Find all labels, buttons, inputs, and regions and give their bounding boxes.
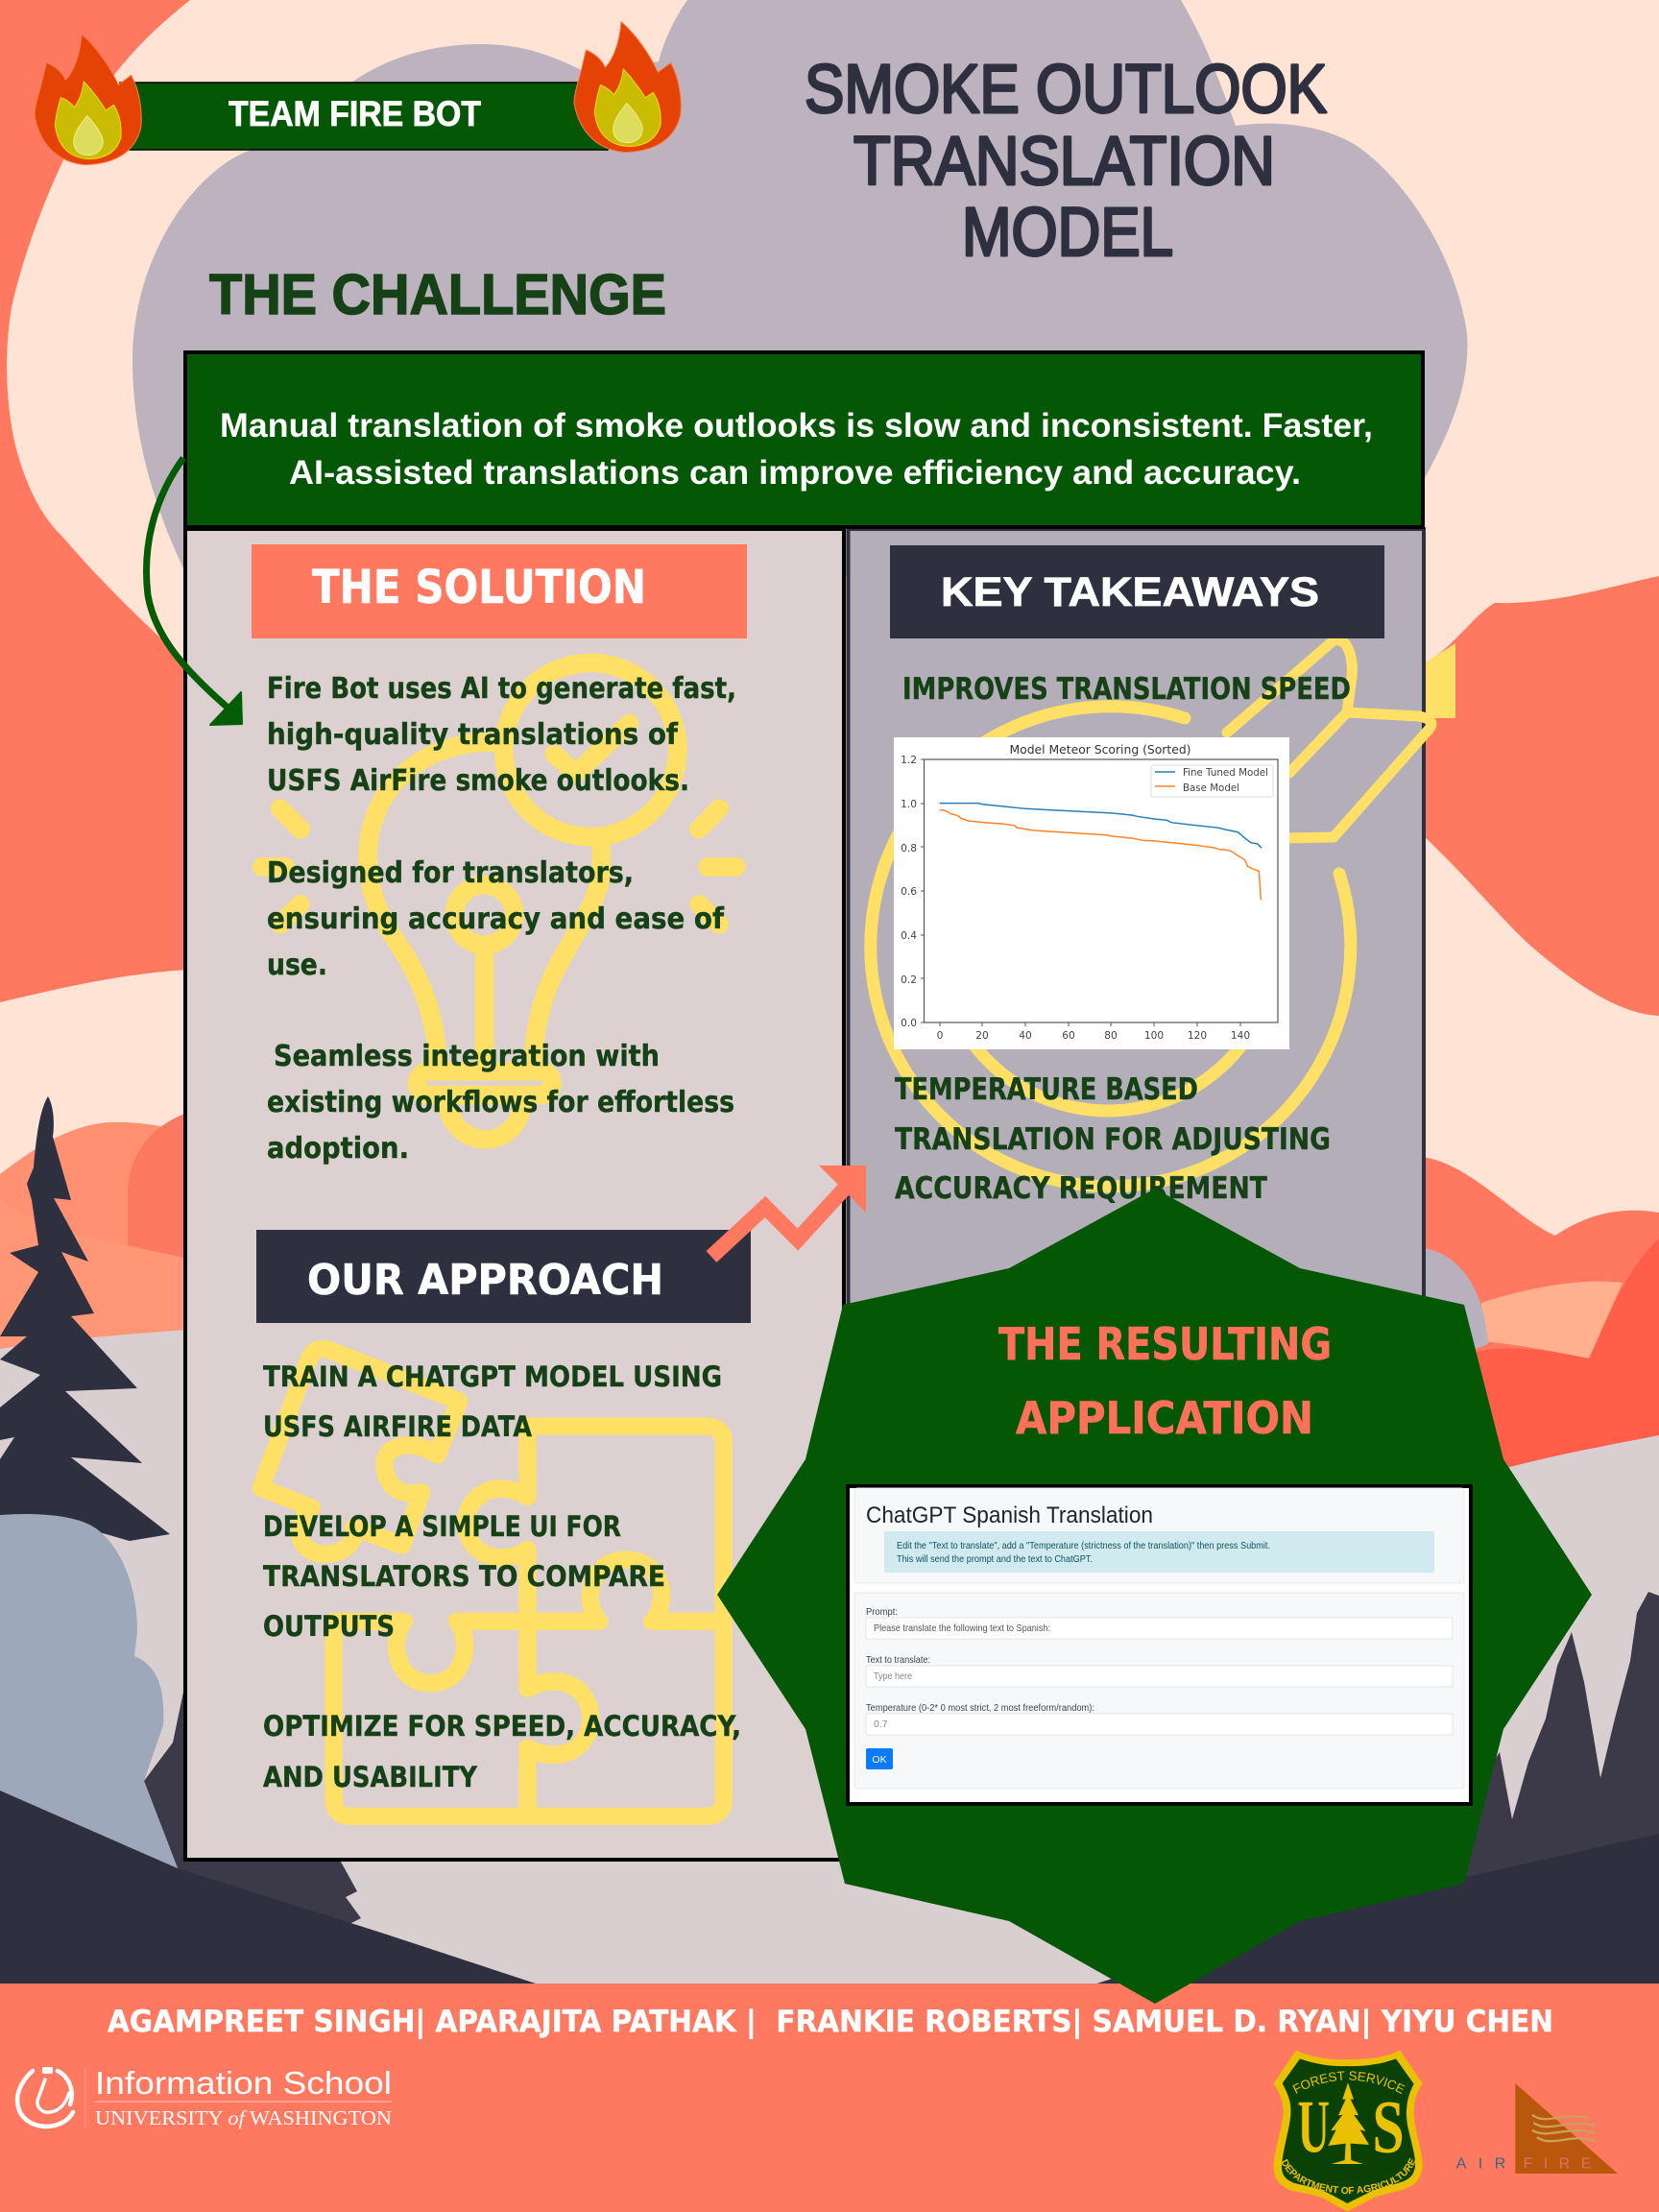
logo: forest service shield: S (1372, 2085, 1405, 2169)
legend: Fine Tuned Model (1183, 767, 1268, 779)
x axis labels: 120 (1188, 1030, 1207, 1042)
right coral hills (1421, 1157, 1659, 1479)
team names: AGAMPREET SINGH| APARAJITA PATHAK | FRANKIE ROBERTS| SAMUEL D. RYAN| YIYU CHEN (108, 2005, 1553, 2039)
title: MODEL (962, 195, 1173, 271)
heading: our approach: OUR APPROACH (307, 1256, 663, 1305)
icon: lightbulb with check (262, 662, 736, 1140)
text: solution points: Designed for translators, (267, 856, 634, 890)
text: temperature based translation: TRANSLATION FOR ADJUSTING (895, 1122, 1331, 1157)
legend (1151, 765, 1273, 797)
x axis labels: 40 (1019, 1030, 1032, 1042)
heading: the resulting application (998, 1318, 1332, 1444)
x axis labels (937, 1030, 1250, 1042)
text: solution points: USFS AirFire smoke outlooks. (267, 764, 689, 798)
heading: our approach (256, 1230, 751, 1323)
application screenshot: Please translate the following text to Spanish: (874, 1623, 1050, 1634)
logo: forest service shield: FOREST SERVICE (1292, 2071, 1406, 2094)
right light band (1481, 1282, 1623, 1358)
text: approach steps (263, 1360, 741, 1793)
text: approach steps: OPTIMIZE FOR SPEED, ACCURACY, (263, 1710, 741, 1743)
right red hill (1469, 1238, 1659, 1479)
text: solution points: Fire Bot uses AI to generate fast, (267, 672, 736, 706)
green challenge box (185, 352, 1423, 527)
arrow: challenge to solution (147, 458, 242, 725)
title: SMOKE OUTLOOK (805, 52, 1327, 128)
text: approach steps: OUTPUTS (263, 1610, 395, 1643)
icon: puzzle (261, 1349, 724, 1816)
dark tree beside bush (144, 1673, 187, 1868)
application screenshot: Type here (874, 1671, 912, 1682)
left hill lower (0, 1200, 187, 1349)
x axis labels: 20 (975, 1030, 989, 1042)
icon: rocket outline (871, 640, 1431, 1187)
title (805, 52, 1327, 271)
application screenshot: Temperature (0-2* 0 most strict, 2 most freeform/random): (866, 1702, 1094, 1714)
heading: the challenge: THE CHALLENGE (209, 263, 666, 326)
heading: key takeaways (890, 545, 1384, 638)
bush (0, 1514, 178, 1868)
team banner: TEAM FIRE BOT (228, 94, 481, 133)
text: approach steps: TRANSLATORS TO COMPARE (263, 1560, 665, 1593)
text: temperature based translation: TEMPERATURE BASED (895, 1072, 1198, 1107)
logo: airfire: AIR (1456, 2155, 1505, 2172)
text: solution points: Seamless integration with (274, 1040, 660, 1073)
application screenshot: Text to translate: (866, 1654, 930, 1666)
y axis labels: 0.8 (901, 843, 917, 854)
x axis labels: 60 (1062, 1030, 1075, 1042)
heading: the resulting application: THE RESULTING (998, 1318, 1332, 1370)
text: solution points (267, 672, 736, 1166)
logo: forest service shield (1273, 2051, 1423, 2212)
text: temperature based translation (895, 1072, 1331, 1206)
left hills (0, 1122, 187, 1382)
application screenshot: Prompt: (866, 1606, 898, 1618)
y axis labels: 1.2 (901, 755, 917, 766)
application screenshot: 0.7 (874, 1719, 888, 1730)
x axis labels: 80 (1104, 1030, 1118, 1042)
text: approach steps: USFS AIRFIRE DATA (263, 1410, 532, 1443)
line chart: Model Meteor Scoring (Sorted) (1010, 742, 1190, 757)
logo: information school: Information School (95, 2065, 392, 2101)
legend: Base Model (1183, 782, 1239, 794)
series: base model (940, 810, 1261, 900)
right ground (1085, 1834, 1659, 1987)
x axis labels: 140 (1231, 1030, 1250, 1042)
arrow: zigzag growth (711, 1166, 866, 1257)
text: improves translation speed: IMPROVES TRANSLATION SPEED (902, 672, 1351, 707)
yellow block (1426, 643, 1455, 718)
logo: forest service shield: DEPARTMENT OF AGRICULTURE (1282, 2158, 1415, 2195)
coral sky left (0, 0, 190, 1002)
y axis labels: 0.0 (901, 1018, 917, 1029)
x axis labels: 100 (1144, 1030, 1164, 1042)
panel: key takeaways (849, 529, 1455, 1585)
footer (0, 1984, 1659, 2212)
y axis labels: 0.4 (901, 930, 917, 942)
application screenshot (848, 1486, 1471, 1804)
right tree layer (1440, 1592, 1659, 1884)
logo: information school (17, 2065, 392, 2129)
text: solution points: use. (267, 949, 327, 982)
application screenshot: ChatGPT Spanish Translation (866, 1503, 1153, 1528)
text: approach steps: DEVELOP A SIMPLE UI FOR (263, 1510, 621, 1543)
title: TRANSLATION (854, 124, 1275, 200)
heading: the resulting application: APPLICATION (1016, 1392, 1313, 1444)
lower left small tree (178, 1853, 394, 1939)
panel: the solution and approach (185, 529, 844, 1860)
text: solution points: existing workflows for effortless (267, 1086, 734, 1119)
icon: left flame (35, 35, 141, 165)
line chart (894, 737, 1289, 1049)
text: solution points: adoption. (267, 1132, 409, 1166)
heading: the solution: THE SOLUTION (312, 561, 646, 614)
smoke cloud (132, 0, 1467, 576)
green challenge box: Manual translation of smoke outlooks is slow and inconsistent. Faster, (220, 407, 1373, 445)
y axis labels: 0.2 (901, 974, 917, 986)
x axis labels: 0 (937, 1030, 944, 1042)
heading: key takeaways: KEY TAKEAWAYS (941, 569, 1319, 615)
application screenshot: OK (872, 1754, 887, 1766)
team banner (120, 83, 608, 150)
logo: airfire (1456, 2083, 1618, 2174)
logo: forest service shield: U (1298, 2085, 1330, 2169)
logo: airfire: FIRE (1524, 2155, 1591, 2172)
application screenshot: This will send the prompt and the text to ChatGPT. (897, 1553, 1093, 1565)
heading: the solution (252, 544, 747, 638)
green challenge box: AI-assisted translations can improve efficiency and accuracy. (289, 454, 1301, 492)
y axis labels: 1.0 (901, 799, 917, 810)
logo: information school: UNIVERSITY of WASHINGTON (95, 2106, 392, 2129)
left hill dark (128, 1113, 187, 1259)
coral sky right (1421, 576, 1659, 1016)
grey blob right (1421, 1248, 1488, 1363)
left ground (0, 1791, 547, 1987)
application screenshot: Edit the "Text to translate", add a "Temperature (strictness of the translation)" then press Submit. (897, 1540, 1270, 1551)
text: approach steps: AND USABILITY (263, 1761, 478, 1793)
text: approach steps: TRAIN A CHATGPT MODEL USING (263, 1360, 722, 1393)
text: solution points: high-quality translations of (267, 718, 679, 752)
y axis labels (901, 755, 917, 1029)
beige valley (0, 1330, 1659, 2016)
panel: the resulting application (717, 1189, 1592, 2004)
series: fine tuned model (940, 804, 1262, 848)
text: temperature based translation: ACCURACY REQUIREMENT (895, 1171, 1267, 1206)
large pine tree (0, 1096, 170, 1541)
icon: right flame (574, 22, 681, 153)
text: solution points: ensuring accuracy and ease of (267, 902, 725, 936)
y axis labels: 0.6 (901, 886, 917, 898)
